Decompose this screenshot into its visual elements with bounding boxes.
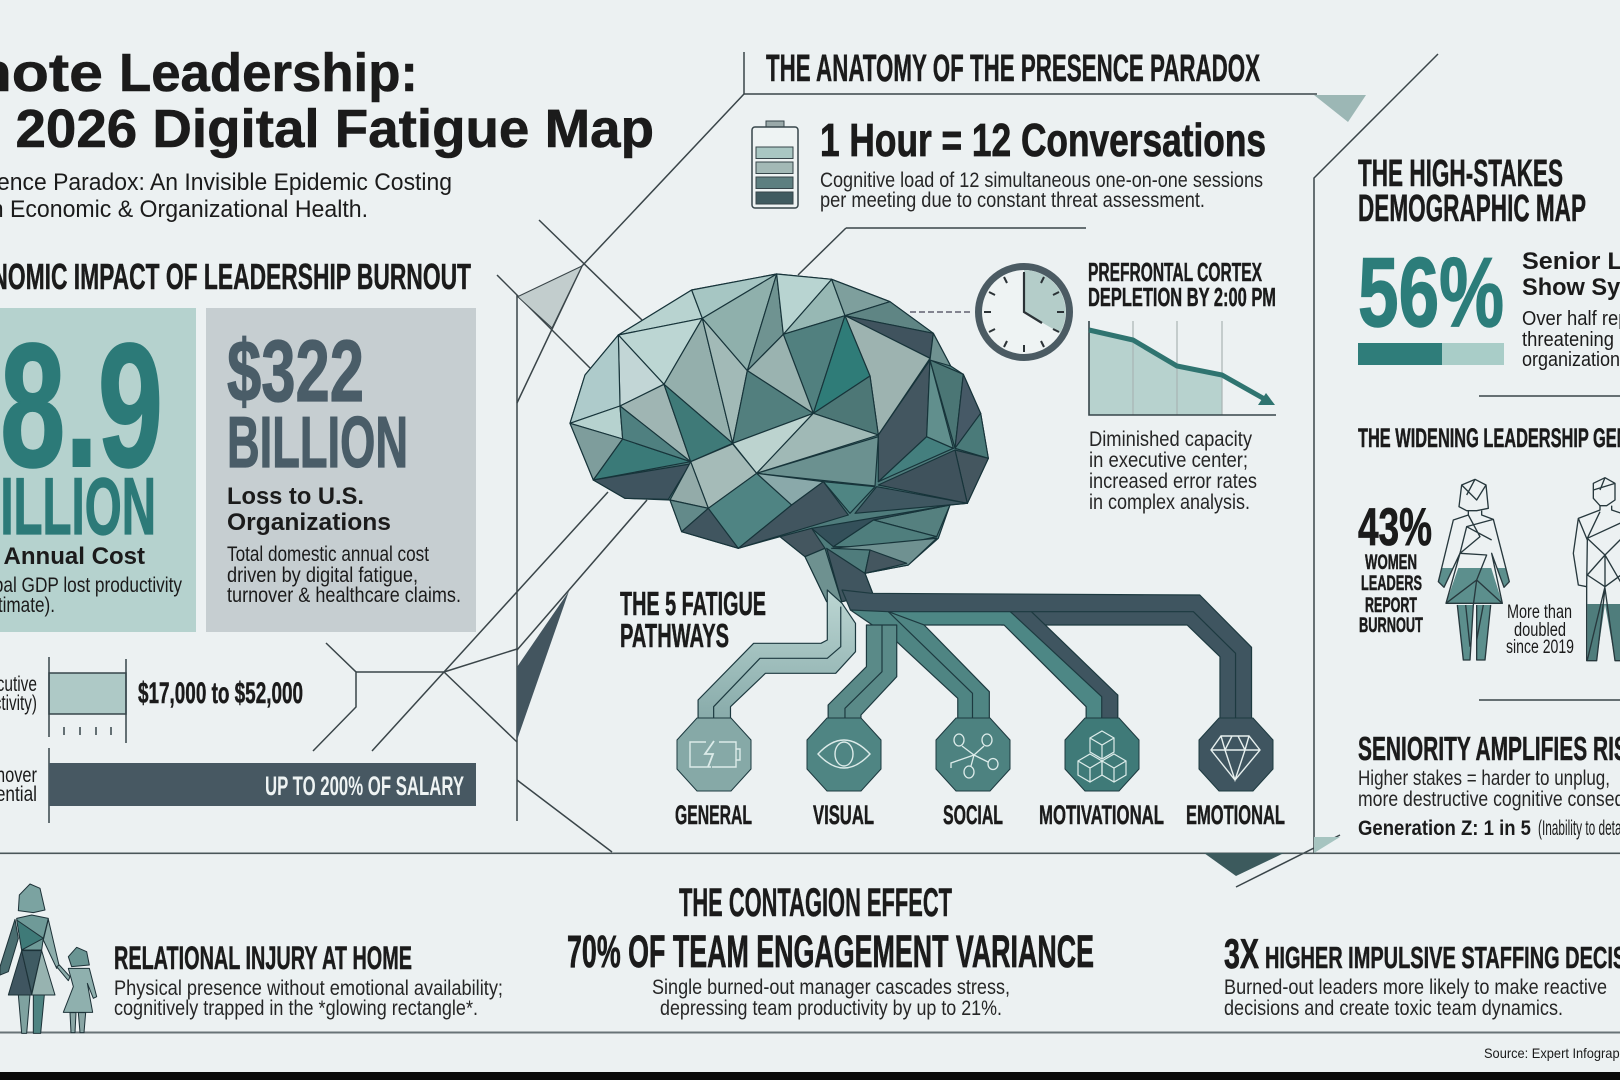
title	[0, 43, 654, 159]
callout: contagion effect	[567, 881, 1094, 1020]
description: cortex depletion	[1089, 428, 1257, 514]
panel: global cost	[0, 308, 196, 632]
title: Leadership:	[119, 43, 418, 103]
big number: 322 billion: BILLION	[227, 403, 408, 483]
description: senior leaders	[1522, 308, 1620, 371]
label: motivational: MOTIVATIONAL	[1039, 800, 1164, 830]
description: US loss: driven by digital fatigue,	[227, 564, 418, 587]
text: more than doubled: More than	[1507, 602, 1572, 623]
panel: US loss	[206, 308, 476, 632]
chart: executive productivity cost	[0, 657, 303, 743]
description: cortex depletion: in executive center;	[1089, 449, 1248, 472]
description: cognitive load	[820, 169, 1263, 212]
chart: turnover potential bar: UP TO 200% OF SALARY	[265, 771, 464, 801]
diagram: pathway connectors	[698, 590, 1252, 718]
callout: relational injury: cognitively trapped in the *glowing rectangle*.	[114, 997, 478, 1020]
heading: prefrontal cortex: DEPLETION BY 2:00 PM	[1088, 282, 1276, 312]
heading: prefrontal cortex	[1088, 257, 1276, 312]
illustration: mother and child	[0, 884, 97, 1033]
icon: woman figure	[1438, 479, 1509, 660]
label: loss to US: Loss to U.S.	[227, 483, 364, 510]
clock connector	[910, 311, 972, 313]
icon: battery bolt	[690, 741, 740, 767]
stat: 43 percent women: REPORT	[1365, 594, 1417, 617]
description: cortex depletion: Diminished capacity	[1089, 428, 1252, 451]
decorative geometric frame lines	[313, 52, 1438, 887]
subtitle	[0, 169, 452, 223]
callout: impulsive staffing: 3X	[1224, 930, 1259, 977]
stat: 43 percent women: LEADERS	[1361, 572, 1422, 595]
stat: one hour: 1 Hour = 12 Conversations	[820, 114, 1266, 166]
icon: eye	[818, 740, 870, 768]
callout: contagion effect: depressing team productivity by up to 21%.	[660, 997, 1002, 1020]
label: social: SOCIAL	[943, 800, 1003, 830]
big number: 8.9 trillion	[0, 308, 163, 552]
heading: five fatigue pathways: PATHWAYS	[620, 617, 729, 654]
heading: five fatigue pathways	[620, 585, 766, 654]
stat: 56 percent	[1358, 237, 1504, 365]
callout: contagion effect: THE CONTAGION EFFECT	[679, 881, 952, 925]
big number: 322 billion: $322	[227, 323, 364, 420]
description: cognitive load: Cognitive load of 12 simultaneous one-on-one sessions	[820, 169, 1263, 192]
description: US loss	[227, 543, 461, 607]
pathway: visual	[807, 718, 881, 830]
icon: clock	[978, 266, 1070, 358]
stat: 43 percent women: 43%	[1358, 498, 1432, 557]
callout: contagion effect: Single burned-out manager cascades stress,	[652, 976, 1010, 999]
heading: anatomy: THE ANATOMY OF THE PRESENCE PARADOX	[766, 48, 1260, 90]
label: visual: VISUAL	[813, 800, 874, 830]
stat: generation z: Generation Z: 1 in 5	[1358, 817, 1531, 840]
illustration: low-poly brain	[570, 274, 988, 602]
callout: impulsive staffing	[1224, 930, 1620, 1020]
description: US loss: turnover & healthcare claims.	[227, 584, 461, 607]
heading: prefrontal cortex: PREFRONTAL CORTEX	[1088, 257, 1262, 287]
description: global cost	[0, 574, 182, 617]
label: senior leaders	[1522, 248, 1620, 301]
stat: 43 percent women	[1358, 498, 1432, 637]
description: senior leaders: threatening	[1522, 329, 1614, 351]
stat: 43 percent women: WOMEN	[1365, 551, 1417, 574]
chart: executive productivity cost: $17,000 to $52,000	[138, 677, 303, 710]
label: loss to US	[227, 483, 391, 536]
stat: 56 percent: 56%	[1358, 237, 1504, 347]
icon: diamond	[1211, 736, 1260, 780]
callout: impulsive staffing: decisions and create toxic team dynamics.	[1224, 997, 1563, 1020]
chart: turnover potential bar	[0, 748, 476, 823]
icon: man figure	[1573, 478, 1620, 661]
pathway: emotional	[1186, 718, 1285, 830]
description: cortex depletion: in complex analysis.	[1089, 491, 1250, 514]
heading: demographic map	[1358, 153, 1586, 230]
progress bar	[1358, 343, 1504, 365]
decorative triangles	[517, 95, 1366, 876]
stat: 43 percent women: BURNOUT	[1359, 614, 1423, 637]
text: more than doubled	[1506, 602, 1574, 658]
pathway: general	[675, 718, 752, 830]
icon: network	[951, 734, 998, 778]
text: more than doubled: since 2019	[1506, 637, 1574, 658]
description: US loss: Total domestic annual cost	[227, 543, 429, 566]
callout: relational injury: Physical presence without emotional availability;	[114, 977, 503, 1000]
description: seniority	[1358, 767, 1620, 811]
callout: relational injury: RELATIONAL INJURY AT HOME	[114, 940, 412, 976]
icon: battery	[752, 121, 798, 208]
description: cortex depletion: increased error rates	[1089, 470, 1257, 493]
callout: contagion effect: 70% OF TEAM ENGAGEMENT VARIANCE	[567, 926, 1094, 977]
icon: stacked cubes	[1078, 731, 1126, 782]
chart: cortex depletion line	[1089, 321, 1276, 415]
pathway: social	[936, 718, 1010, 830]
heading: five fatigue pathways: THE 5 FATIGUE	[620, 585, 766, 622]
text: more than doubled: doubled	[1514, 620, 1566, 641]
label: loss to US: Organizations	[227, 509, 391, 536]
label: emotional: EMOTIONAL	[1186, 800, 1285, 830]
description: cognitive load: per meeting due to constant threat assessment.	[820, 189, 1205, 212]
pathway: motivational	[1039, 718, 1164, 830]
big number: 322 billion	[227, 323, 408, 483]
callout: relational injury	[114, 940, 503, 1020]
label: general: GENERAL	[675, 800, 752, 830]
